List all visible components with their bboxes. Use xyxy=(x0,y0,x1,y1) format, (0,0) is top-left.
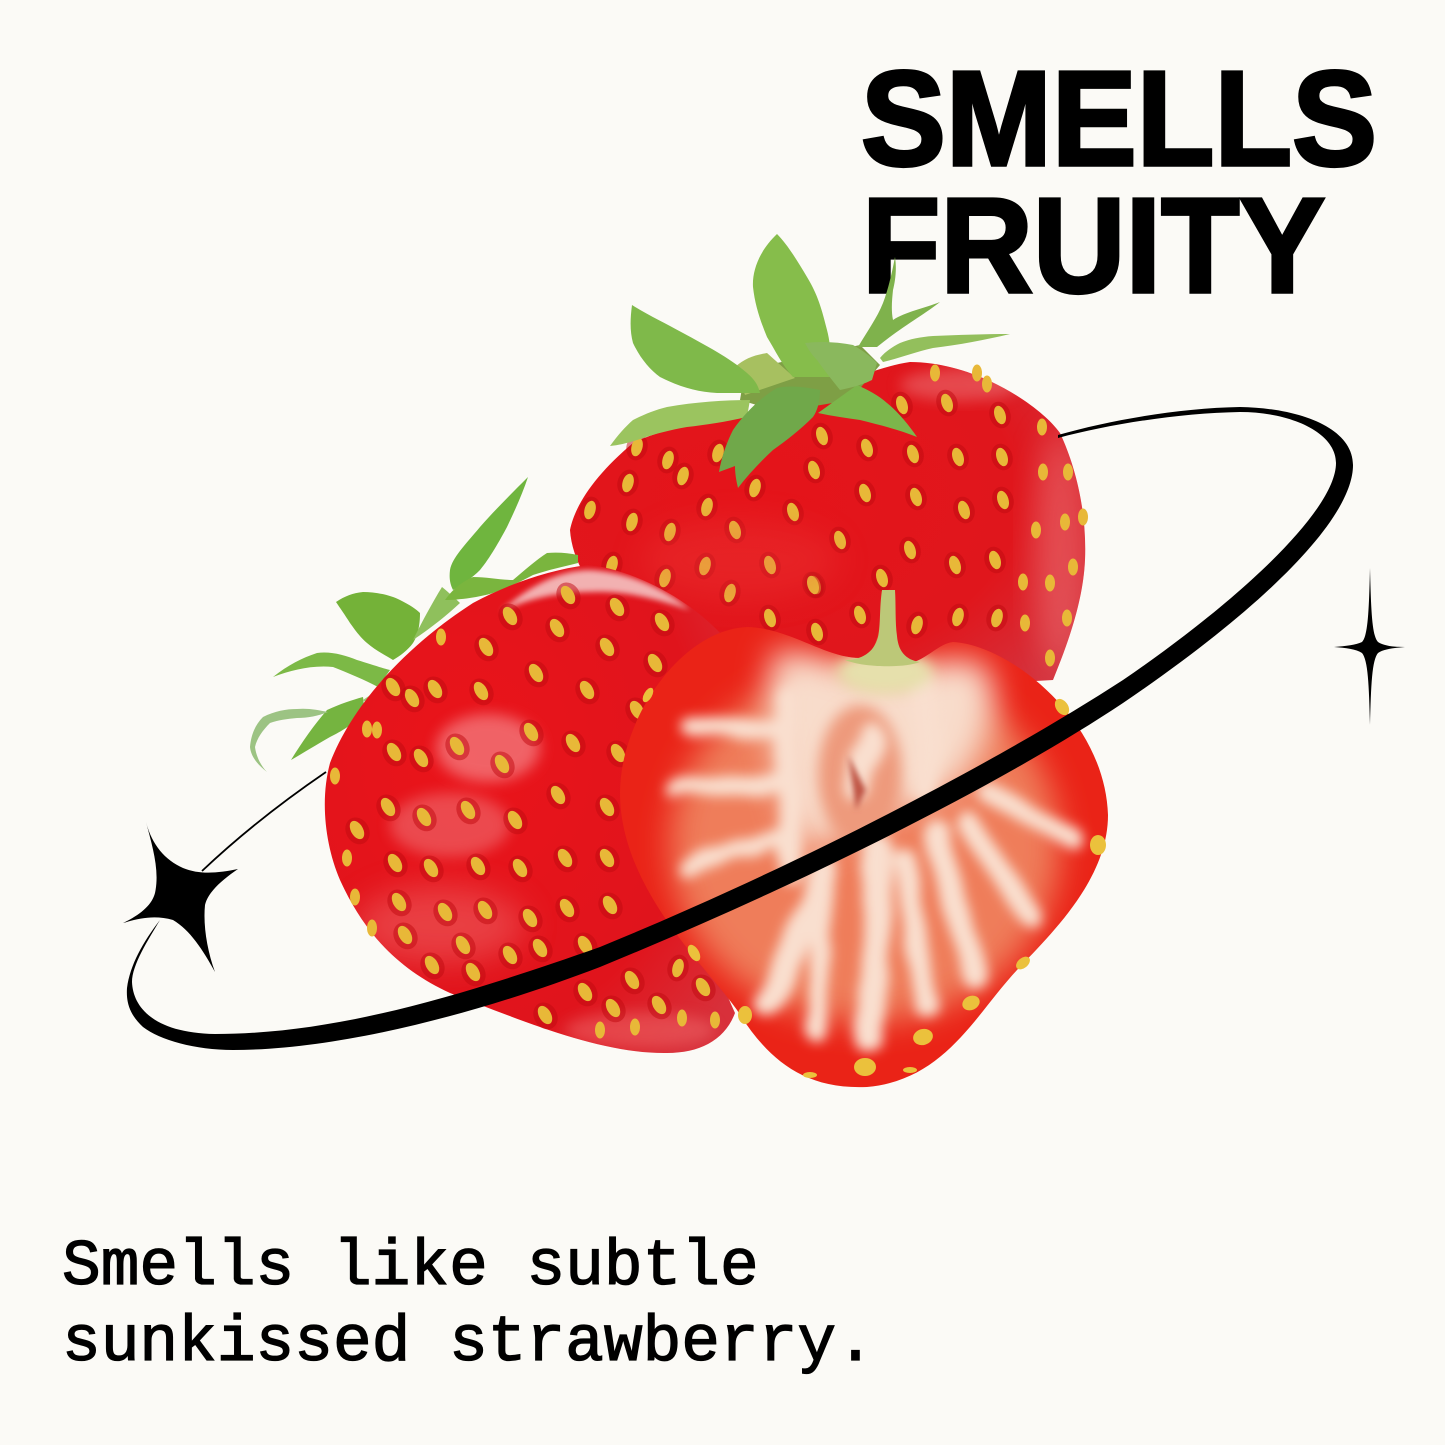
far leaf xyxy=(735,353,795,395)
calyx centre mass xyxy=(740,345,880,412)
icon: small sparkle xyxy=(1334,568,1405,725)
stem leaf xyxy=(858,257,940,347)
cut strawberry rim seeds xyxy=(641,686,1106,1078)
cut strawberry inner core and streaks xyxy=(670,650,1075,1040)
right leaf xyxy=(818,385,917,437)
pale upper shoulder xyxy=(770,650,993,850)
left strawberry body xyxy=(325,565,735,1053)
curled leaf xyxy=(250,709,328,772)
left strawberry leaves xyxy=(250,477,578,772)
back strawberry xyxy=(570,362,1088,700)
description text: sunkissed strawberry. xyxy=(62,1307,875,1380)
calyx sliver xyxy=(363,687,387,713)
left leaf xyxy=(631,305,760,393)
cut strawberry stem xyxy=(845,590,920,666)
title: SMELLS xyxy=(861,43,1377,194)
left strawberry seeds xyxy=(330,578,720,1038)
calyx triangle xyxy=(413,587,460,640)
description text: Smells like subtle xyxy=(62,1231,759,1304)
tall leaf xyxy=(450,477,528,590)
title xyxy=(861,43,1377,321)
back strawberry highlight xyxy=(640,520,840,600)
long leaf xyxy=(273,652,390,687)
top leaf xyxy=(753,234,831,377)
left strawberry highlights xyxy=(355,570,715,1048)
inner chamber xyxy=(818,705,902,845)
cut strawberry half xyxy=(620,590,1108,1087)
icon: large four-point star xyxy=(123,822,238,972)
orbit ring: thick front sweep xyxy=(127,407,1353,1050)
lower leaf xyxy=(291,697,365,760)
description text xyxy=(62,1231,875,1380)
green shoulder under stem xyxy=(837,650,933,694)
title: FRUITY xyxy=(862,170,1325,321)
back strawberry seeds xyxy=(576,364,1088,666)
left strawberry xyxy=(250,477,735,1053)
center upper leaf xyxy=(805,342,877,390)
round leaf xyxy=(336,592,420,660)
orbit ring: thin back segment xyxy=(202,772,326,871)
pale radial streaks xyxy=(675,690,1075,1040)
back strawberry body xyxy=(570,362,1085,700)
back strawberry leaves xyxy=(610,234,1010,488)
orange mid zone xyxy=(670,667,1060,1023)
calyx strip xyxy=(445,553,578,600)
back strawberry pink sheen xyxy=(900,369,1086,670)
far right leaf xyxy=(880,334,1010,362)
front leaf xyxy=(719,387,820,488)
cut strawberry flesh xyxy=(620,590,1108,1087)
center cavity xyxy=(848,755,866,810)
lower left leaf xyxy=(610,400,750,446)
